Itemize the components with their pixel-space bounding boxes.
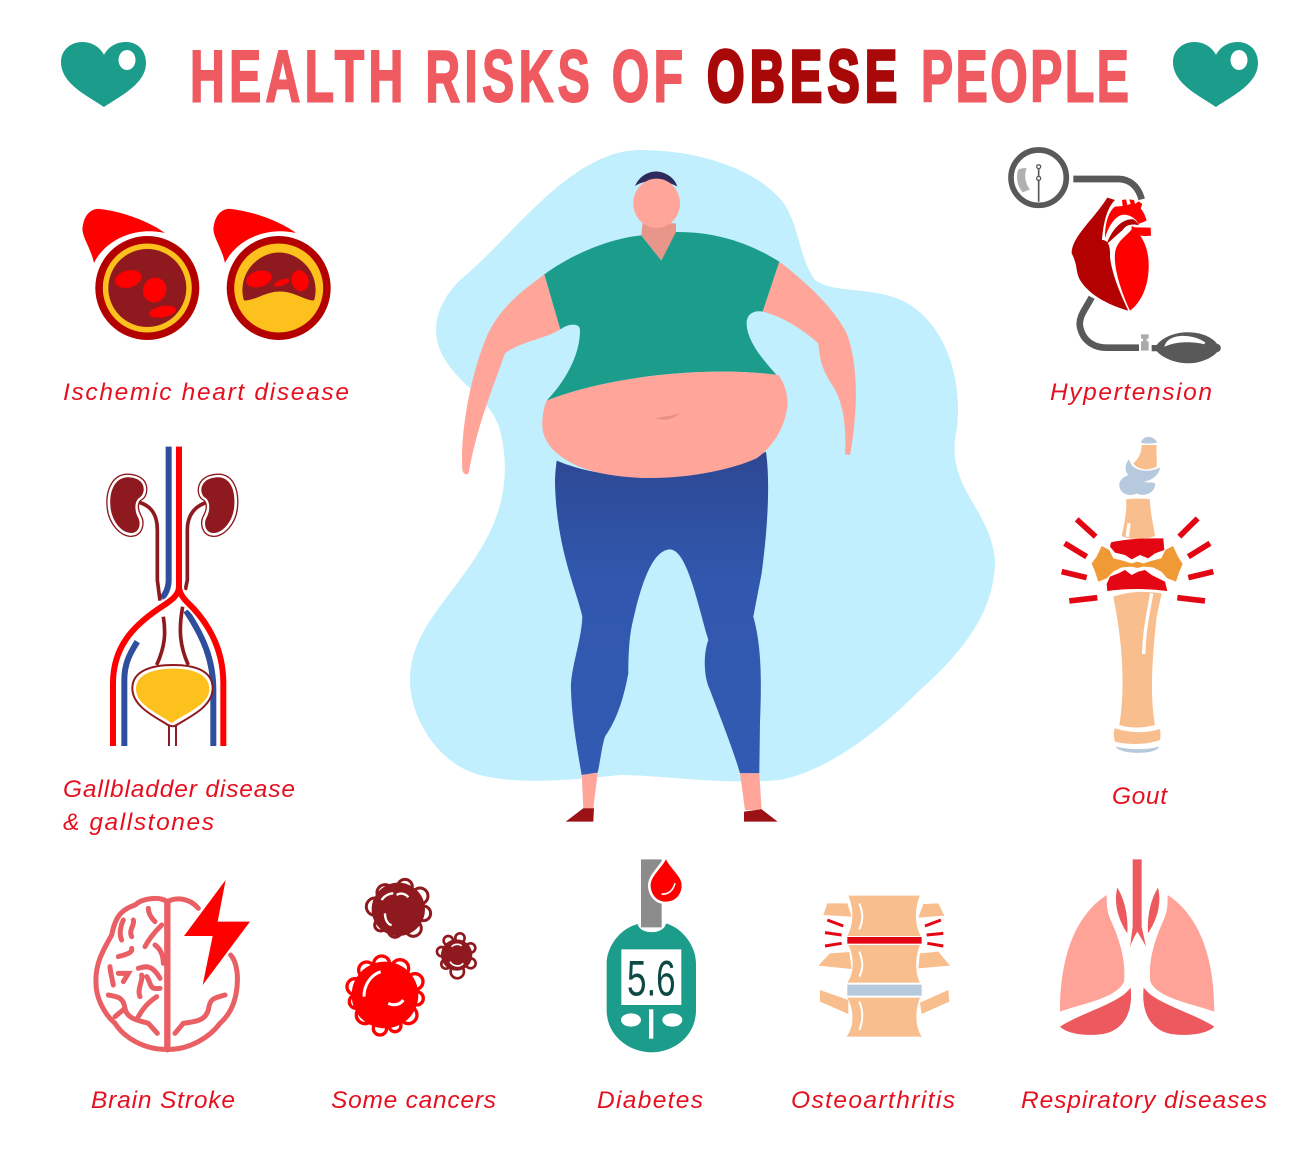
- pain ticks: [825, 920, 943, 946]
- icon: brain stroke: [96, 880, 250, 1049]
- reading: 5.6: [627, 951, 676, 1007]
- trousers: [555, 452, 778, 822]
- background blob: [410, 150, 995, 781]
- lower lobes and airway: [1060, 859, 1214, 1035]
- upper lobes: [1060, 895, 1214, 1012]
- icon: lungs: [1060, 859, 1214, 1035]
- tubes: [1073, 179, 1142, 348]
- obese man figure: [462, 172, 856, 822]
- torso, head and arms: [462, 172, 856, 478]
- label: respiratory diseases: Respiratory diseases: [1021, 1087, 1267, 1114]
- label: some cancers: Some cancers: [331, 1087, 496, 1114]
- bolt: [184, 880, 250, 985]
- vertebrae: [818, 896, 950, 1037]
- veins: [124, 447, 213, 746]
- label: ischemic heart disease: Ischemic heart disease: [63, 379, 349, 406]
- icon: arteries (ischemic heart disease): [82, 209, 331, 340]
- icon: glucose meter: [607, 859, 696, 1052]
- label: hypertension: Hypertension: [1050, 379, 1212, 406]
- screen: [621, 949, 681, 1005]
- blood drop: [651, 859, 682, 902]
- icon: cancer tumours: [347, 879, 476, 1035]
- buttons: [621, 1009, 682, 1039]
- healthy artery: [82, 209, 199, 340]
- title: [190, 37, 1129, 118]
- label: osteoarthritis: Osteoarthritis: [791, 1087, 955, 1114]
- bladder: [132, 665, 213, 746]
- test strip: [641, 859, 662, 927]
- cartilage: [1119, 437, 1160, 495]
- title: OBESE: [707, 37, 897, 118]
- label: gallbladder disease: Gallbladder disease: [63, 776, 295, 803]
- damaged disc: [847, 937, 922, 944]
- gauge: [1011, 150, 1066, 205]
- meter body: [607, 923, 696, 1052]
- icon: gout joint: [1062, 437, 1213, 753]
- large red tumour: [347, 956, 423, 1035]
- label: gallbladder disease: & gallstones: [63, 809, 214, 836]
- dark tumour: [366, 879, 431, 937]
- inflamed cartilage: [1107, 538, 1167, 591]
- healthy disc: [847, 985, 922, 996]
- small tumour: [437, 933, 476, 978]
- icon: left heart: [61, 42, 146, 107]
- label: brain stroke: Brain Stroke: [91, 1087, 235, 1114]
- bones: [1113, 445, 1162, 744]
- icon: hypertension: [1011, 150, 1221, 363]
- blocked artery: [213, 209, 331, 340]
- ureters: [137, 502, 209, 665]
- label: gallbladder disease: [63, 776, 295, 836]
- label: diabetes: Diabetes: [597, 1087, 703, 1114]
- title: HEALTH RISKS OF: [190, 37, 683, 118]
- brain: [96, 898, 237, 1049]
- heart: [1072, 198, 1151, 311]
- icon: spine osteoarthritis: [818, 896, 950, 1037]
- pain rays: [1062, 518, 1213, 601]
- icon: right heart: [1173, 42, 1258, 107]
- kidneys: [107, 474, 238, 536]
- label: gout: Gout: [1112, 783, 1168, 810]
- arteries: [113, 447, 223, 746]
- title: PEOPLE: [921, 37, 1129, 118]
- bulb: [1141, 332, 1221, 363]
- icon: urinary system: [107, 447, 238, 746]
- inflamed tissue: [1092, 546, 1183, 582]
